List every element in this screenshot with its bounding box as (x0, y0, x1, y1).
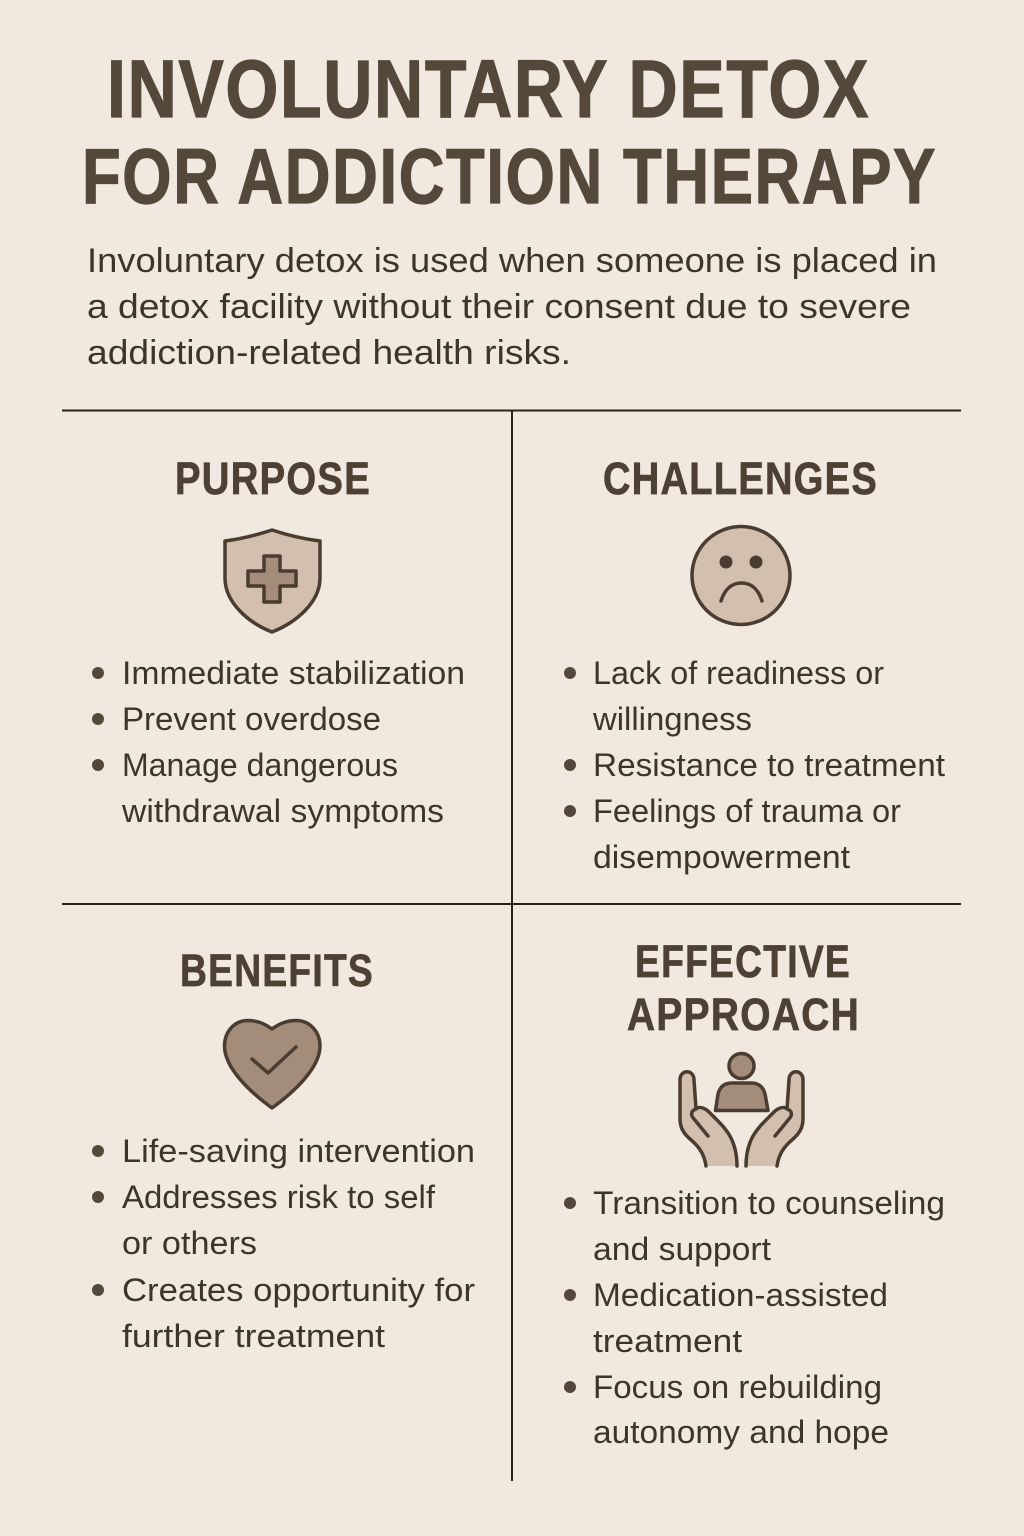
intro text (87, 242, 937, 372)
list: benefits: or others (122, 1225, 257, 1261)
icon: hands holding person (680, 1054, 803, 1166)
list: benefits: Life-saving intervention (122, 1133, 475, 1169)
list: effective approach (564, 1185, 945, 1450)
list: effective approach: Transition to counseling (593, 1185, 945, 1221)
list: purpose: Prevent overdose (122, 701, 381, 737)
list: effective approach: Focus on rebuilding (593, 1369, 882, 1405)
list: purpose: withdrawal symptoms (121, 793, 444, 829)
list: purpose: Immediate stabilization (122, 655, 465, 691)
list: challenges: Lack of readiness or (593, 655, 884, 691)
list: effective approach: Medication-assisted (593, 1277, 888, 1313)
title (82, 44, 937, 220)
icon: heart with check (224, 1020, 320, 1108)
heading: effective approach: EFFECTIVE (635, 936, 851, 987)
list: benefits: Creates opportunity for (122, 1272, 475, 1308)
intro text: addiction-related health risks. (87, 334, 571, 372)
panel: challenges (564, 453, 945, 875)
heading: purpose: PURPOSE (175, 453, 371, 504)
list: effective approach: and support (593, 1231, 771, 1267)
list: challenges: Resistance to treatment (593, 747, 945, 783)
list: purpose (92, 655, 465, 829)
icon: shield with cross (225, 530, 320, 632)
heading: effective approach: APPROACH (627, 989, 860, 1040)
intro text: a detox facility without their consent due to severe (87, 288, 911, 326)
list: benefits (92, 1133, 475, 1354)
list: effective approach: autonomy and hope (593, 1414, 889, 1450)
icon: sad face (692, 526, 790, 624)
heading: benefits: BENEFITS (180, 945, 374, 996)
list: benefits: further treatment (122, 1318, 385, 1354)
title: INVOLUNTARY DETOX (107, 44, 870, 135)
heading: challenges: CHALLENGES (603, 453, 878, 504)
list: effective approach: treatment (593, 1323, 742, 1359)
list: purpose: Manage dangerous (122, 747, 398, 783)
panel: purpose (92, 453, 465, 829)
list: challenges: Feelings of trauma or (593, 793, 901, 829)
panel: benefits (92, 945, 475, 1354)
list: challenges (564, 655, 945, 875)
list: challenges: disempowerment (593, 839, 850, 875)
intro text: Involuntary detox is used when someone is placed in (87, 242, 937, 280)
panel: effective approach (564, 936, 945, 1450)
heading: effective approach (627, 936, 860, 1040)
list: benefits: Addresses risk to self (122, 1179, 435, 1215)
list: challenges: willingness (592, 701, 752, 737)
